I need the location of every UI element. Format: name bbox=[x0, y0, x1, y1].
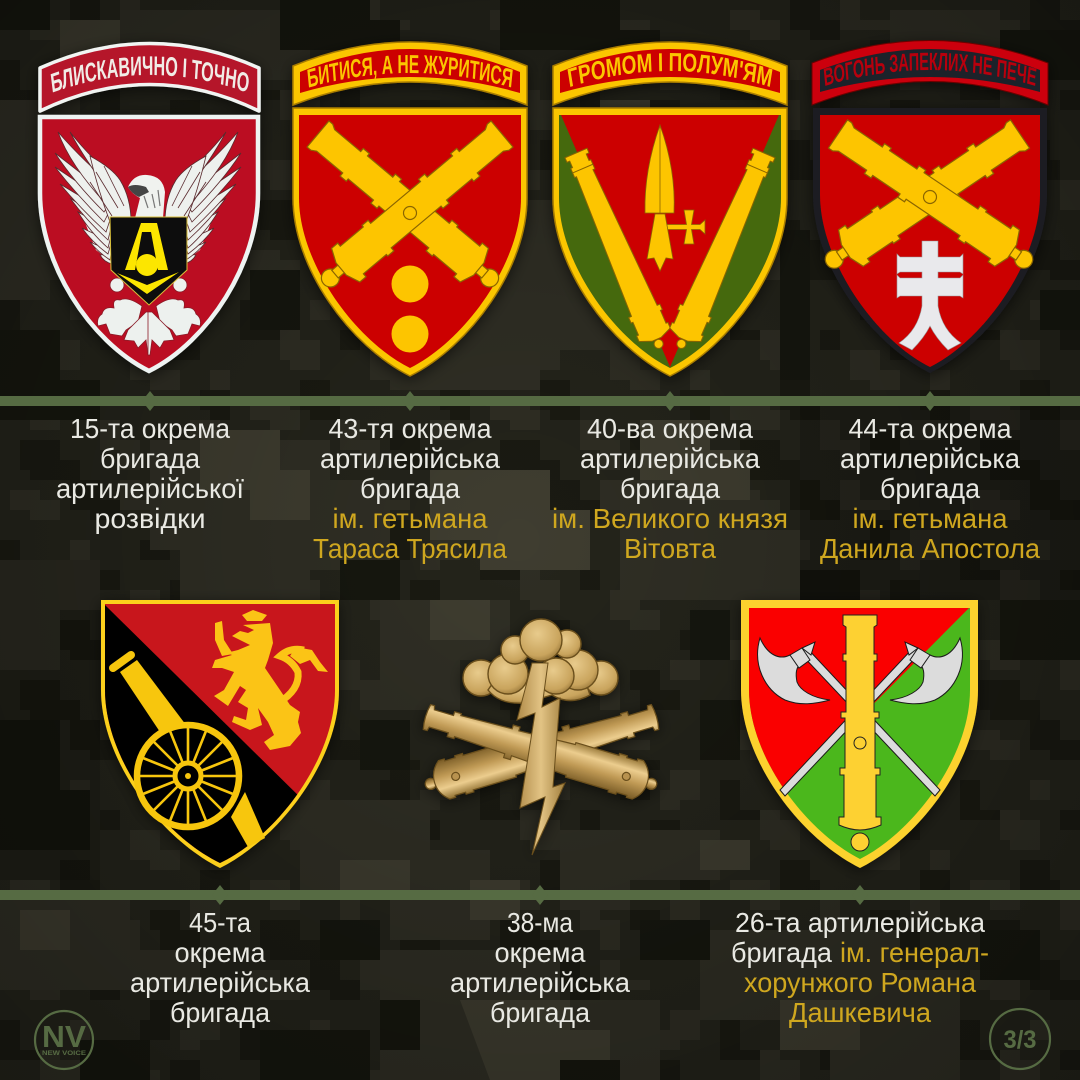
badge: 15th artillery reconnaissance brigade bbox=[36, 42, 262, 376]
crossed poleaxes bbox=[758, 638, 962, 796]
label: 40th brigade: артилерійська bbox=[580, 443, 760, 474]
shield bbox=[553, 108, 787, 376]
logo: New Voice: NV bbox=[42, 1019, 86, 1054]
field cannon bbox=[113, 655, 265, 847]
lightning bolt bbox=[517, 663, 565, 855]
page counter bbox=[990, 1009, 1050, 1069]
label: 45th brigade: окрема bbox=[174, 937, 266, 968]
label: 45th brigade: 45-та bbox=[189, 907, 251, 938]
label: 15th brigade: артилерійської bbox=[56, 473, 244, 504]
label: 38th brigade: окрема bbox=[494, 937, 586, 968]
red field bbox=[740, 608, 969, 799]
divider: top row bbox=[0, 391, 1080, 411]
page counter: 3/3 bbox=[1004, 1026, 1036, 1054]
label: 38th brigade: артилерійська bbox=[450, 967, 630, 998]
label: 45th brigade: артилерійська bbox=[130, 967, 310, 998]
label: 40th brigade: 40-ва окрема bbox=[587, 413, 753, 444]
label: 15th brigade bbox=[56, 413, 244, 534]
label: 26th brigade: бригада bbox=[731, 937, 832, 968]
shield bbox=[293, 108, 527, 376]
label: 44th brigade: бригада bbox=[880, 473, 980, 504]
label: 43rd brigade: артилерійська bbox=[320, 443, 500, 474]
crossed cannons bbox=[304, 117, 516, 301]
eagle head bbox=[128, 175, 165, 218]
label: 38th brigade: 38-ма bbox=[507, 907, 573, 938]
left cannon bbox=[560, 146, 676, 355]
crossed cannons bbox=[815, 116, 1043, 283]
badge: 44th artillery brigade bbox=[812, 40, 1048, 375]
label: 43rd brigade: 43-тя окрема bbox=[328, 413, 492, 444]
black inner shield bbox=[110, 217, 187, 305]
crossed bronze cannons bbox=[420, 697, 662, 805]
right cannon bbox=[664, 146, 780, 355]
label: 45th brigade bbox=[130, 907, 310, 1028]
logo: New Voice bbox=[35, 1011, 93, 1069]
label: 40th brigade bbox=[552, 413, 788, 564]
yellow emblem bbox=[117, 223, 179, 294]
motto tab: ГРОМОМ І ПОЛУМ'ЯМ bbox=[568, 53, 772, 87]
shield bbox=[813, 108, 1047, 373]
label: 44th brigade: ім. гетьмана bbox=[852, 503, 1008, 534]
logo: New Voice: NEW VOICE bbox=[42, 1050, 87, 1057]
label: 43rd brigade bbox=[313, 413, 507, 564]
label: 38th brigade: бригада bbox=[490, 997, 590, 1028]
shield bbox=[40, 117, 258, 371]
badge: 26th artillery brigade bbox=[740, 600, 978, 868]
label: 40th brigade: бригада bbox=[620, 473, 720, 504]
label: 40th brigade: Вітовта bbox=[624, 533, 716, 564]
upright cannon bbox=[839, 615, 881, 851]
spearhead with cross bbox=[645, 125, 705, 271]
label: 38th brigade bbox=[450, 907, 630, 1028]
label: 44th brigade: артилерійська bbox=[840, 443, 1020, 474]
motto tab: БИТИСЯ, А НЕ ЖУРИТИСЯ bbox=[307, 55, 513, 88]
label: 26th brigade: 26-та артилерійська bbox=[735, 907, 985, 938]
badge: 45th artillery brigade bbox=[90, 600, 339, 880]
label: 26th brigade: хорунжого Романа bbox=[744, 967, 976, 998]
label: 15th brigade: 15-та окрема bbox=[70, 413, 230, 444]
label: 26th brigade bbox=[731, 907, 989, 1028]
label: 43rd brigade: бригада bbox=[360, 473, 460, 504]
right eagle wing bbox=[165, 132, 241, 264]
label: 26th brigade: Дашкевича bbox=[789, 997, 931, 1028]
double cross bbox=[897, 241, 963, 350]
badge: 43rd artillery brigade bbox=[290, 41, 530, 380]
label: 15th brigade: розвідки bbox=[94, 503, 206, 534]
insignia: 38th brigade crossed cannons and lightning bbox=[420, 619, 662, 855]
badge: 40th artillery brigade bbox=[550, 41, 790, 378]
motto tab: ВОГОНЬ ЗАПЕКЛИХ НЕ ПЕЧЕ bbox=[824, 52, 1036, 86]
crowned lion bbox=[212, 610, 328, 750]
label: 15th brigade: бригада bbox=[100, 443, 200, 474]
cannon balls bbox=[392, 266, 428, 302]
label: 44th brigade: 44-та окрема bbox=[848, 413, 1012, 444]
label: 43rd brigade: ім. гетьмана bbox=[332, 503, 488, 534]
label: 26th brigade: ім. генерал- bbox=[840, 937, 989, 968]
label: 44th brigade bbox=[820, 413, 1040, 564]
label: 43rd brigade: Тараса Трясила bbox=[313, 533, 507, 564]
shield bbox=[101, 600, 339, 868]
label: 44th brigade: Данила Апостола bbox=[820, 533, 1040, 564]
motto tab bbox=[550, 41, 788, 106]
eagle claws and tail bbox=[98, 278, 200, 355]
left eagle wing bbox=[55, 132, 131, 264]
motto tab bbox=[37, 42, 262, 115]
divider: bottom row bbox=[0, 885, 1080, 905]
label: 40th brigade: ім. Великого князя bbox=[552, 503, 788, 534]
motto tab bbox=[290, 41, 530, 106]
shield bbox=[741, 600, 978, 868]
motto tab: БЛИСКАВИЧНО І ТОЧНО bbox=[50, 56, 249, 92]
cloud bbox=[463, 619, 618, 703]
label: 45th brigade: бригада bbox=[170, 997, 270, 1028]
black field bbox=[105, 605, 298, 863]
motto tab bbox=[812, 40, 1048, 106]
